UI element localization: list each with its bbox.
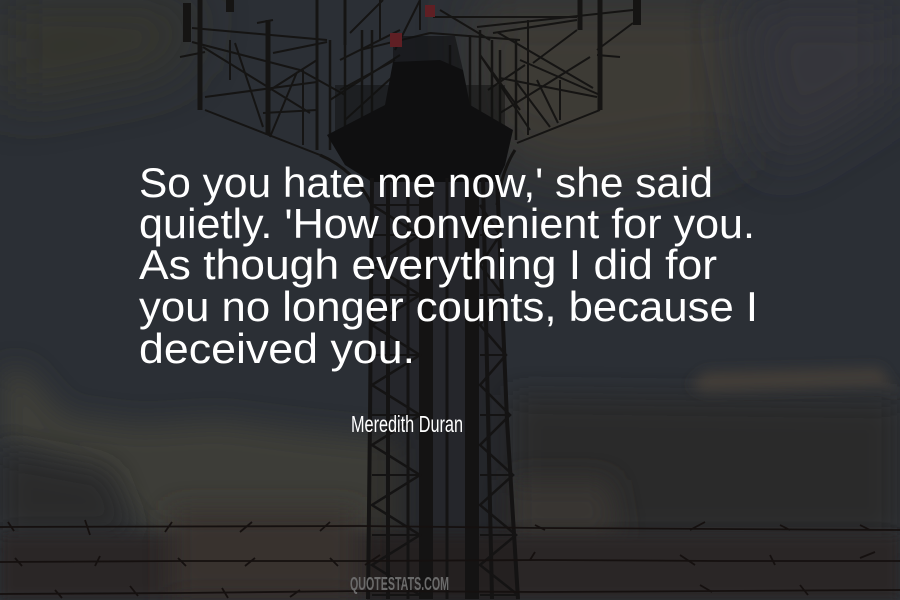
quote line 2: quietly. 'How convenient for you.	[139, 200, 755, 247]
barbed wire	[0, 520, 900, 598]
watermark: QUOTESTATS.COM	[350, 574, 449, 594]
quote text	[139, 159, 758, 372]
left lattice	[180, 20, 345, 155]
quote line 1: So you hate me now,' she said	[139, 159, 713, 206]
author name: Meredith Duran	[351, 411, 463, 437]
quote line 3: As though everything I did for	[139, 241, 717, 288]
red beacons	[390, 5, 435, 47]
quote line 5: deceived you.	[139, 325, 415, 372]
quote line 4: you no longer counts, because I	[139, 283, 758, 330]
tower lattice mast	[367, 178, 520, 600]
tower central body	[327, 36, 513, 182]
right lattice	[433, 10, 633, 143]
tower top platform and antennas	[180, 0, 637, 155]
tower flare curves	[320, 150, 515, 205]
